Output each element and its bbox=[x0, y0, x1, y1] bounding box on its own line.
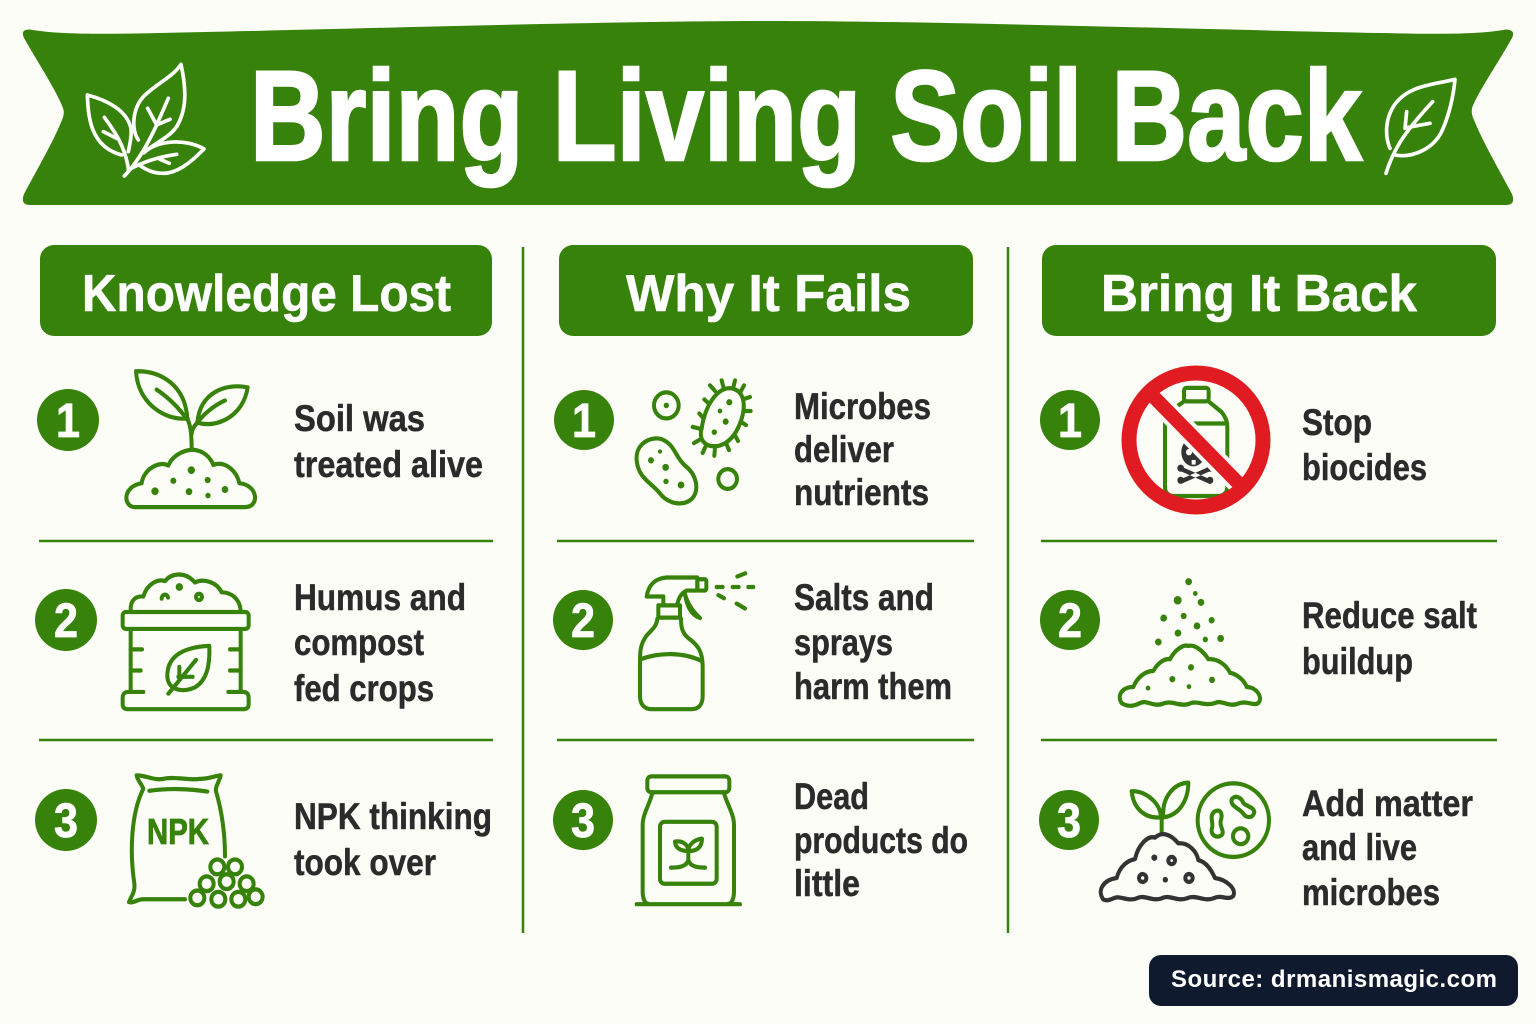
icon: soil sprout and microbes bbox=[1101, 783, 1269, 900]
text: humus and compost fed crops: fed crops bbox=[294, 668, 434, 709]
heading: knowledge lost bbox=[40, 245, 492, 336]
badge 2: 2 bbox=[571, 595, 595, 648]
panel: bring it back bbox=[1039, 245, 1497, 913]
text: add matter and live microbes bbox=[1302, 783, 1473, 913]
heading: why it fails bbox=[559, 245, 973, 336]
badge 1 bbox=[37, 389, 99, 451]
badge 3 bbox=[553, 790, 613, 850]
icon: spray bottle bbox=[640, 573, 753, 709]
badge 3 bbox=[1039, 790, 1099, 850]
column dividers bbox=[523, 247, 1008, 933]
icon: microbes bbox=[637, 380, 751, 503]
badge 2 bbox=[553, 590, 613, 650]
text: microbes deliver nutrients: deliver bbox=[794, 429, 894, 470]
text: reduce salt buildup: buildup bbox=[1302, 641, 1413, 682]
badge 2: 2 bbox=[54, 595, 78, 648]
text: dead products do little bbox=[794, 776, 968, 904]
text: reduce salt buildup: Reduce salt bbox=[1302, 595, 1477, 636]
icon: salt pile bbox=[1120, 578, 1260, 706]
badge 2 bbox=[35, 589, 97, 651]
source badge bbox=[1149, 955, 1518, 1006]
text: dead products do little: little bbox=[794, 863, 860, 904]
icon: NPK fertilizer bag: NPK bbox=[147, 811, 209, 852]
text: salts and sprays harm them bbox=[794, 577, 952, 707]
text: stop biocides bbox=[1302, 402, 1427, 488]
badge 1: 1 bbox=[56, 395, 80, 448]
text: add matter and live microbes: and live bbox=[1302, 827, 1417, 868]
text: salts and sprays harm them: harm them bbox=[794, 666, 952, 707]
text: microbes deliver nutrients: Microbes bbox=[794, 386, 931, 427]
text: NPK thinking took over: NPK thinking bbox=[294, 796, 492, 837]
source badge: Source: drmanismagic.com bbox=[1171, 966, 1497, 993]
icon: leaf cluster bbox=[87, 64, 204, 176]
text: humus and compost fed crops: compost bbox=[294, 622, 424, 663]
heading: bring it back bbox=[1042, 245, 1496, 336]
badge 3: 3 bbox=[1057, 795, 1081, 848]
text: dead products do little: Dead bbox=[794, 776, 869, 817]
text: NPK thinking took over bbox=[294, 796, 492, 883]
text: soil was treated alive bbox=[294, 398, 483, 485]
text: salts and sprays harm them: Salts and bbox=[794, 577, 934, 618]
text: add matter and live microbes: microbes bbox=[1302, 872, 1440, 913]
panel: knowledge lost bbox=[35, 245, 493, 907]
badge 3: 3 bbox=[54, 795, 78, 848]
badge 1: 1 bbox=[572, 395, 596, 448]
badge 1 bbox=[1040, 390, 1100, 450]
text: microbes deliver nutrients: nutrients bbox=[794, 472, 929, 513]
badge 2 bbox=[1040, 590, 1100, 650]
icon: sprout in soil bbox=[126, 371, 255, 507]
heading: knowledge lost: Knowledge Lost bbox=[82, 265, 451, 323]
text: NPK thinking took over: took over bbox=[294, 842, 436, 883]
badge 1 bbox=[554, 390, 614, 450]
text: reduce salt buildup bbox=[1302, 595, 1477, 682]
heading: bring it back: Bring It Back bbox=[1101, 265, 1417, 323]
badge 1: 1 bbox=[1058, 395, 1082, 448]
icon: no biocides bottle bbox=[1129, 373, 1263, 507]
heading: why it fails: Why It Fails bbox=[626, 265, 911, 323]
text: dead products do little: products do bbox=[794, 820, 968, 861]
badge 2: 2 bbox=[1058, 595, 1082, 648]
text: humus and compost fed crops: Humus and bbox=[294, 577, 466, 618]
badge 3: 3 bbox=[571, 795, 595, 848]
panel: why it fails bbox=[553, 245, 974, 904]
text: salts and sprays harm them: sprays bbox=[794, 622, 893, 663]
title banner bbox=[23, 21, 1513, 205]
text: humus and compost fed crops bbox=[294, 577, 466, 709]
text: stop biocides: Stop bbox=[1302, 402, 1372, 443]
icon: product jar bbox=[637, 776, 740, 904]
icon: single leaf bbox=[1386, 79, 1455, 173]
text: soil was treated alive: Soil was bbox=[294, 398, 425, 439]
text: stop biocides: biocides bbox=[1302, 447, 1427, 488]
icon: compost bin bbox=[123, 574, 249, 709]
badge 3 bbox=[35, 789, 97, 851]
text: microbes deliver nutrients bbox=[794, 386, 931, 513]
text: add matter and live microbes: Add matter bbox=[1302, 783, 1473, 824]
text: soil was treated alive: treated alive bbox=[294, 444, 483, 485]
icon: NPK fertilizer bag bbox=[129, 775, 263, 907]
